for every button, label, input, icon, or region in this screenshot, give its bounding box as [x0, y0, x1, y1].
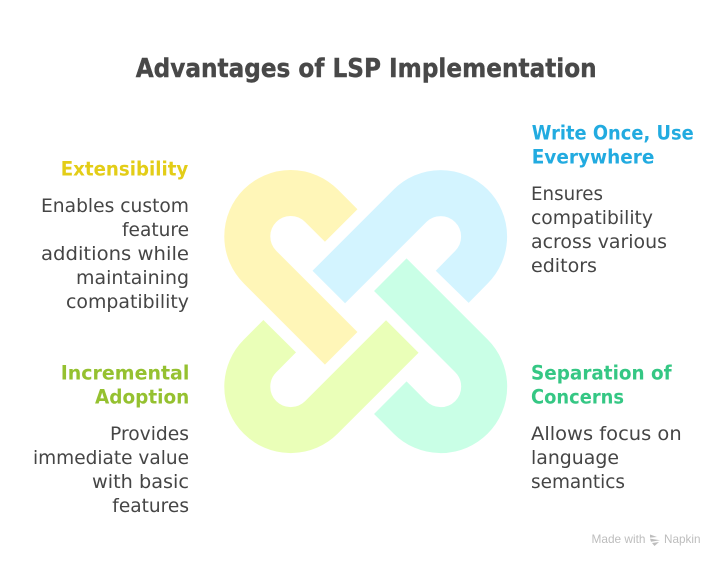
text: write once description — [531, 183, 667, 277]
link: mint — [390, 275, 484, 430]
text: incremental adoption description: features — [112, 495, 189, 517]
text: separation of concerns description: Allows focus on — [531, 423, 682, 445]
text: separation of concerns description — [531, 423, 682, 493]
heading: extensibility: Extensibility — [61, 158, 189, 180]
text: extensibility description: additions while — [41, 243, 189, 265]
text: extensibility description: Enables custom — [41, 195, 189, 217]
text: incremental adoption description: with basic — [92, 471, 189, 493]
heading: separation of concerns: Separation of — [531, 362, 672, 384]
icon: napkin logo — [650, 534, 660, 546]
panel: extensibility — [41, 158, 189, 313]
link: yellow — [247, 193, 341, 348]
text: extensibility description: feature — [122, 219, 189, 241]
heading: write once — [532, 122, 694, 168]
text: write once description: across various — [531, 231, 667, 253]
chain link diagram — [247, 193, 484, 430]
watermark: made with napkin — [592, 532, 700, 546]
text: incremental adoption description: Provides — [110, 423, 189, 445]
heading: separation of concerns — [531, 362, 672, 408]
text: write once description: compatibility — [531, 207, 653, 229]
link: blue — [329, 193, 484, 287]
heading: incremental adoption — [61, 362, 189, 408]
text: extensibility description: maintaining — [76, 267, 189, 289]
heading: separation of concerns: Concerns — [531, 386, 624, 408]
text: write once description: editors — [531, 255, 597, 277]
title: Advantages of LSP Implementation — [136, 54, 597, 84]
text: incremental adoption description — [33, 423, 189, 517]
link: lime — [247, 336, 402, 430]
heading: write once: Everywhere — [532, 146, 654, 168]
panel: incremental adoption — [33, 362, 189, 517]
heading: write once: Write Once, Use — [532, 122, 694, 144]
text: extensibility description — [41, 195, 189, 313]
text: incremental adoption description: immediate value — [33, 447, 189, 469]
text: write once description: Ensures — [531, 183, 603, 205]
heading: incremental adoption: Adoption — [95, 386, 189, 408]
text: extensibility description: compatibility — [66, 291, 189, 313]
watermark: made with napkin: Made with — [592, 532, 646, 546]
panel: write once — [531, 122, 694, 277]
text: separation of concerns description: language — [531, 447, 619, 469]
watermark: made with napkin: Napkin — [664, 532, 700, 546]
text: separation of concerns description: semantics — [531, 471, 625, 493]
panel: separation of concerns — [531, 362, 682, 493]
heading: incremental adoption: Incremental — [61, 362, 189, 384]
